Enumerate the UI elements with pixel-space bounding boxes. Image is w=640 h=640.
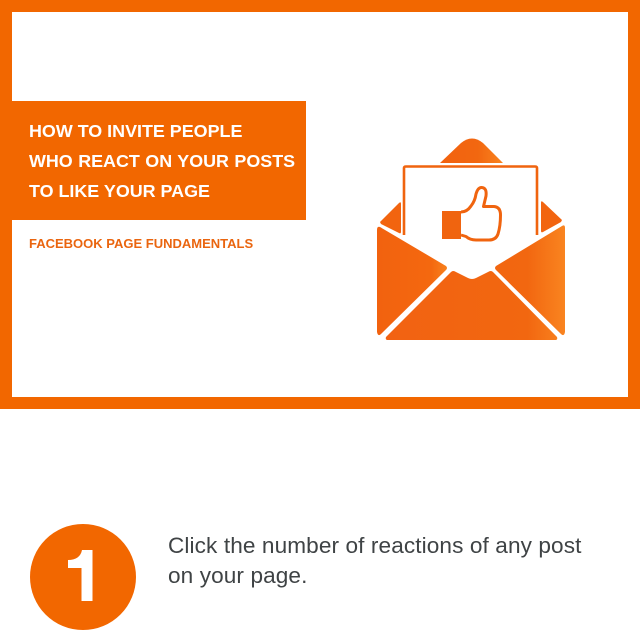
thumb cuff [442, 211, 461, 239]
title line 2: WHO REACT ON YOUR POSTS [29, 151, 295, 171]
step number: 1 [66, 536, 106, 616]
icon: thumbs up [442, 187, 500, 240]
title line 1: HOW TO INVITE PEOPLE [29, 121, 242, 141]
right envelope panel [495, 225, 565, 335]
panel: orange framed cover [0, 0, 640, 409]
left envelope panel [377, 227, 447, 335]
title banner [0, 101, 306, 220]
subtitle: FACEBOOK PAGE FUNDAMENTALS [29, 236, 253, 251]
letter outline [404, 166, 537, 235]
step number badge [30, 524, 136, 630]
left small flap [380, 202, 401, 233]
number shape [68, 550, 92, 601]
right small flap [541, 201, 562, 232]
step instruction [168, 533, 582, 588]
top flap [440, 138, 503, 163]
title line 3: TO LIKE YOUR PAGE [29, 181, 210, 201]
step instruction: on your page. [168, 563, 307, 588]
step instruction: Click the number of reactions of any post [168, 533, 582, 558]
thumb outline [461, 187, 500, 240]
bottom envelope panel [386, 271, 557, 340]
